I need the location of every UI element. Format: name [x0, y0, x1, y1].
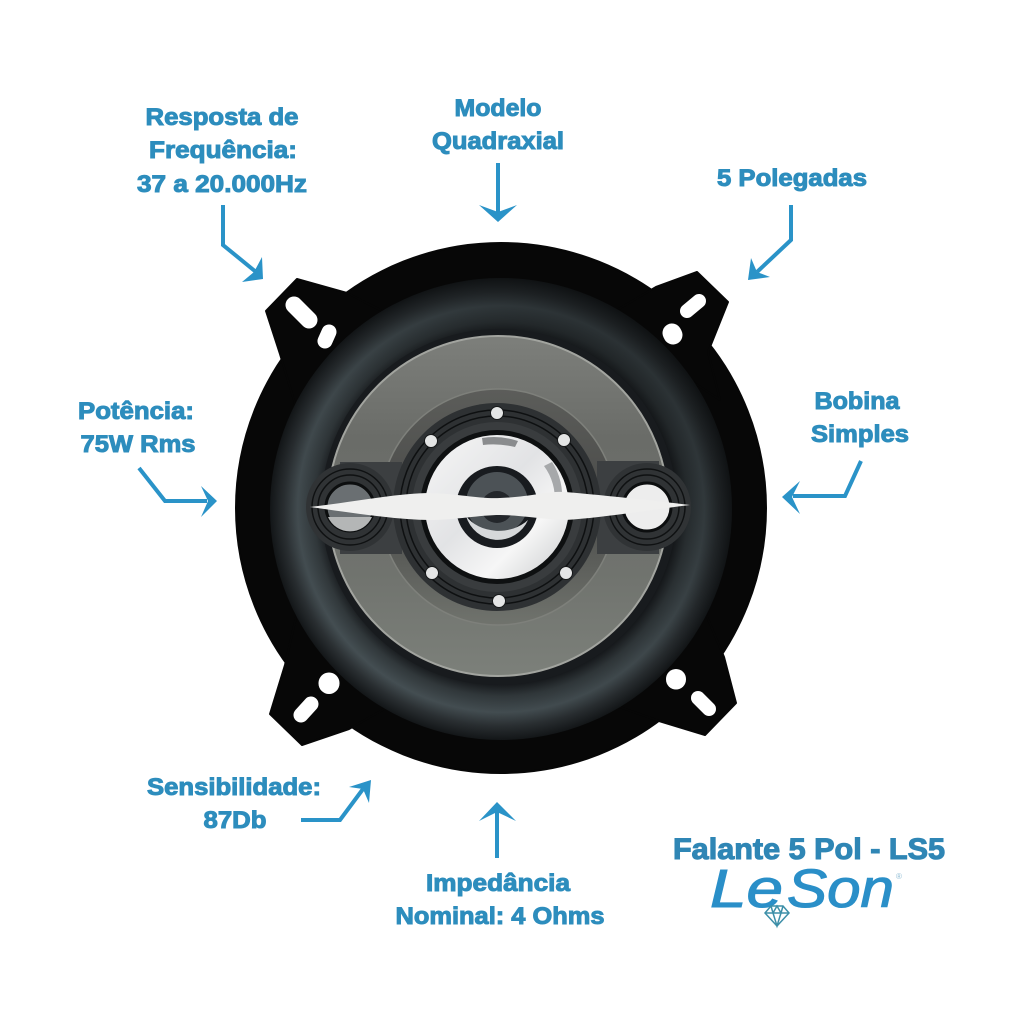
arrow: frequency response	[223, 205, 263, 282]
label: impedance: Nominal: 4 Ohms	[396, 903, 604, 930]
arrow: coil	[782, 461, 861, 514]
bridge bars	[340, 461, 659, 554]
label: power: Potência:	[78, 398, 194, 425]
speaker	[236, 243, 766, 773]
label: frequency response: Frequência:	[149, 137, 297, 164]
icon: diamond	[765, 906, 789, 926]
right tweeter	[603, 463, 691, 551]
arrow: power	[139, 468, 217, 517]
label: model: Modelo	[454, 95, 542, 122]
brand logo: ®	[896, 872, 902, 881]
label: coil: Simples	[811, 421, 909, 448]
brand logo: Son	[787, 859, 894, 919]
label: impedance: Impedância	[426, 870, 571, 897]
rubber surround	[270, 278, 732, 740]
left tweeter	[306, 463, 394, 551]
chrome dome	[425, 435, 569, 579]
cone disc	[321, 329, 677, 685]
brand logo	[710, 859, 902, 926]
midrange ring	[393, 403, 601, 611]
arrow: model	[479, 163, 517, 222]
label: coil: Bobina	[814, 388, 900, 415]
label: frequency response	[137, 104, 307, 198]
arrow: size	[748, 205, 791, 280]
label: coil	[811, 388, 909, 448]
label: impedance	[396, 870, 604, 930]
arrow: sensitivity	[301, 780, 371, 820]
product title: Falante 5 Pol - LS5	[673, 833, 945, 866]
label: sensitivity: 87Db	[204, 807, 266, 834]
brand logo: Le	[710, 859, 783, 919]
label: power: 75W Rms	[80, 431, 196, 458]
label: size: 5 Polegadas	[717, 165, 867, 192]
label: sensitivity	[147, 774, 321, 834]
label: model: Quadraxial	[432, 128, 564, 155]
chrome blade	[310, 492, 690, 520]
label: model	[432, 95, 564, 155]
label: power	[78, 398, 196, 458]
label: frequency response: 37 a 20.000Hz	[137, 171, 307, 198]
screws	[424, 406, 572, 608]
arrow: impedance	[479, 802, 516, 858]
label: frequency response: Resposta de	[146, 104, 298, 131]
mounting holes	[294, 301, 709, 715]
mounting frame with tabs	[236, 243, 766, 773]
label: sensitivity: Sensibilidade:	[147, 774, 321, 801]
